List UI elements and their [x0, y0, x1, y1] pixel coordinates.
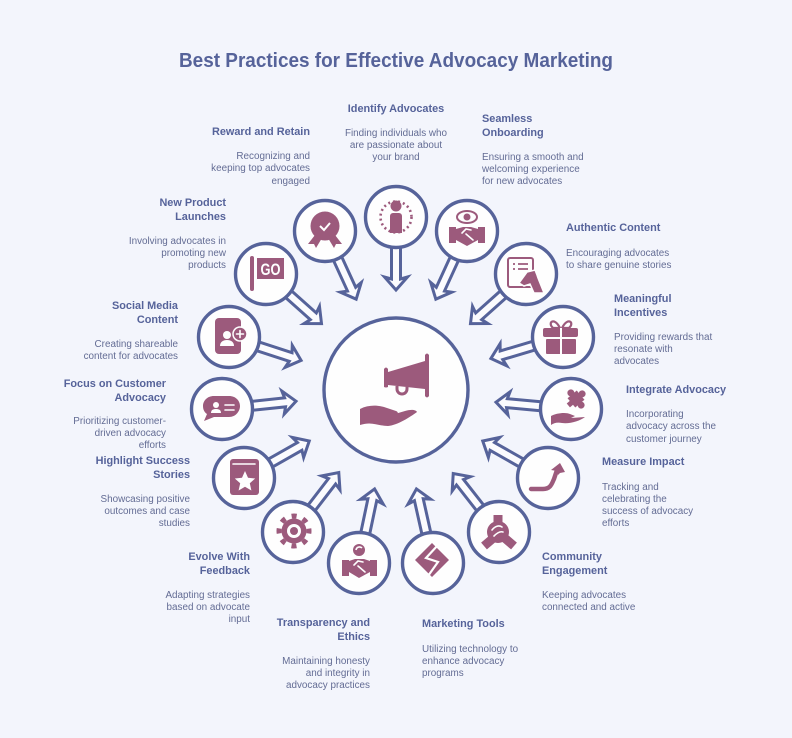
label: reward and retain: keeping top advocates — [211, 163, 310, 174]
label: meaningful incentives: Meaningful — [614, 293, 671, 305]
label: measure impact — [602, 456, 693, 529]
label: evolve with feedback: Adapting strategies — [165, 590, 250, 601]
label: highlight success stories: Highlight Success — [96, 455, 190, 467]
label: integrate advocacy: advocacy across the — [626, 421, 717, 432]
node: measure impact icon — [518, 448, 578, 508]
label: reward and retain: Reward and Retain — [212, 126, 310, 138]
label: social media content: Content — [137, 314, 178, 326]
label: identify advocates — [345, 103, 448, 163]
label: highlight success stories: outcomes and case — [104, 506, 191, 517]
arrow: identify advocates — [384, 222, 408, 290]
label: community engagement: Engagement — [542, 565, 608, 577]
label: new product launches: New Product — [159, 197, 226, 209]
label: measure impact: Tracking and — [602, 482, 659, 493]
label: integrate advocacy — [626, 384, 726, 445]
label: new product launches: products — [188, 260, 226, 271]
label: highlight success stories: Stories — [153, 469, 190, 481]
label: focus on customer advocacy — [64, 378, 167, 451]
label: reward and retain: engaged — [272, 176, 310, 187]
arrow: focus on customer advocacy — [227, 390, 297, 420]
label: identify advocates: your brand — [372, 152, 420, 163]
label: highlight success stories: studies — [159, 518, 190, 529]
node: new product launches icon: GO — [260, 260, 280, 279]
node: social media content icon — [198, 306, 260, 368]
label: evolve with feedback: based on advocate — [167, 602, 250, 613]
label: community engagement: Keeping advocates — [542, 590, 626, 601]
label: marketing tools: programs — [422, 668, 464, 679]
label: marketing tools — [422, 618, 519, 679]
label: focus on customer advocacy: driven advocacy — [95, 428, 166, 439]
label: transparency and ethics — [277, 617, 370, 691]
label: new product launches — [129, 197, 227, 271]
node: marketing tools icon — [402, 532, 464, 594]
arrow: highlight success stories — [244, 431, 315, 485]
label: transparency and ethics: Ethics — [337, 631, 370, 643]
label: authentic content: to share genuine stories — [566, 260, 671, 271]
arrow: authentic content — [463, 270, 529, 332]
label: social media content: Creating shareable — [95, 339, 178, 350]
label: community engagement: connected and active — [542, 602, 636, 613]
node: new product launches icon — [236, 244, 296, 304]
arrow: meaningful incentives — [488, 328, 559, 369]
label: focus on customer advocacy: Advocacy — [115, 392, 166, 404]
node: integrate advocacy icon — [540, 378, 602, 440]
label: new product launches: promoting new — [161, 248, 227, 259]
label: new product launches: Involving advocates in — [129, 236, 226, 247]
node: transparency and ethics icon — [328, 532, 390, 594]
arrow: integrate advocacy — [495, 391, 565, 420]
label: authentic content: Authentic Content — [566, 222, 661, 234]
label: transparency and ethics: Maintaining honesty — [282, 656, 370, 667]
arrow: social media content — [233, 328, 305, 371]
arrow: reward and retain — [317, 233, 367, 304]
label: identify advocates: Identify Advocates — [348, 103, 444, 115]
label: measure impact: celebrating the — [602, 494, 667, 505]
label: community engagement: Community — [542, 551, 602, 563]
label: measure impact: efforts — [602, 518, 629, 529]
label: meaningful incentives: Incentives — [614, 307, 667, 319]
node: reward and retain icon — [294, 200, 356, 262]
arrow: marketing tools — [405, 486, 442, 558]
label: highlight success stories: Showcasing positive — [101, 494, 190, 505]
node: seamless onboarding icon — [436, 200, 498, 262]
label: integrate advocacy: Incorporating — [626, 409, 684, 420]
label: meaningful incentives — [614, 293, 713, 367]
label: social media content — [84, 300, 179, 362]
label: transparency and ethics: advocacy practices — [286, 680, 370, 691]
label: focus on customer advocacy: efforts — [139, 440, 166, 451]
arrow: seamless onboarding — [425, 233, 475, 304]
arrow: measure impact — [477, 431, 548, 485]
label: focus on customer advocacy: Prioritizing customer- — [73, 416, 166, 427]
arrow: community engagement — [444, 466, 504, 534]
label: integrate advocacy: customer journey — [626, 434, 702, 445]
label: meaningful incentives: Providing rewards that — [614, 332, 713, 343]
label: integrate advocacy: Integrate Advocacy — [626, 384, 726, 396]
arrow: transparency and ethics — [349, 487, 386, 558]
label: seamless onboarding: welcoming experience — [481, 164, 580, 175]
label: marketing tools: enhance advocacy — [422, 656, 504, 667]
node: focus on customer advocacy icon — [192, 378, 252, 440]
label: seamless onboarding: Seamless — [482, 113, 532, 125]
label: measure impact: Measure Impact — [602, 456, 685, 468]
label: evolve with feedback: Evolve With — [188, 551, 250, 563]
central hub: megaphone and hand — [324, 318, 468, 462]
label: seamless onboarding: for new advocates — [482, 176, 562, 187]
arrow: evolve with feedback — [288, 466, 348, 533]
label: reward and retain — [211, 126, 310, 187]
node: evolve with feedback icon — [262, 502, 324, 562]
label: evolve with feedback: input — [229, 614, 250, 625]
label: seamless onboarding: Ensuring a smooth and — [482, 152, 584, 163]
node: highlight success stories icon — [214, 448, 274, 508]
label: marketing tools: Utilizing technology to — [422, 644, 519, 655]
label: social media content: Social Media — [112, 300, 179, 312]
label: meaningful incentives: resonate with — [614, 344, 673, 355]
label: meaningful incentives: advocates — [614, 356, 659, 367]
label: marketing tools: Marketing Tools — [422, 618, 505, 630]
node: identify advocates icon — [366, 186, 426, 248]
label: evolve with feedback — [165, 551, 251, 625]
label: highlight success stories — [96, 455, 191, 529]
node: community engagement icon — [468, 502, 530, 562]
label: seamless onboarding: Onboarding — [482, 127, 544, 139]
label: identify advocates: are passionate about — [350, 140, 442, 151]
node: meaningful incentives icon — [532, 306, 594, 368]
label: focus on customer advocacy: Focus on Customer — [64, 378, 167, 390]
label: reward and retain: Recognizing and — [236, 151, 310, 162]
arrow: new product launches — [263, 270, 329, 332]
label: community engagement — [542, 551, 636, 613]
label: transparency and ethics: Transparency and — [277, 617, 370, 629]
label: new product launches: Launches — [175, 211, 226, 223]
label: measure impact: success of advocacy — [602, 506, 693, 517]
title: Best Practices for Effective Advocacy Marketing — [179, 50, 613, 72]
label: identify advocates: Finding individuals who — [345, 128, 448, 139]
label: social media content: content for advocates — [84, 351, 178, 362]
node: authentic content icon — [496, 244, 556, 304]
label: seamless onboarding — [481, 113, 584, 187]
label: transparency and ethics: and integrity in — [306, 668, 370, 679]
label: evolve with feedback: Feedback — [200, 565, 251, 577]
label: authentic content — [566, 222, 671, 271]
label: authentic content: Encouraging advocates — [566, 248, 669, 259]
